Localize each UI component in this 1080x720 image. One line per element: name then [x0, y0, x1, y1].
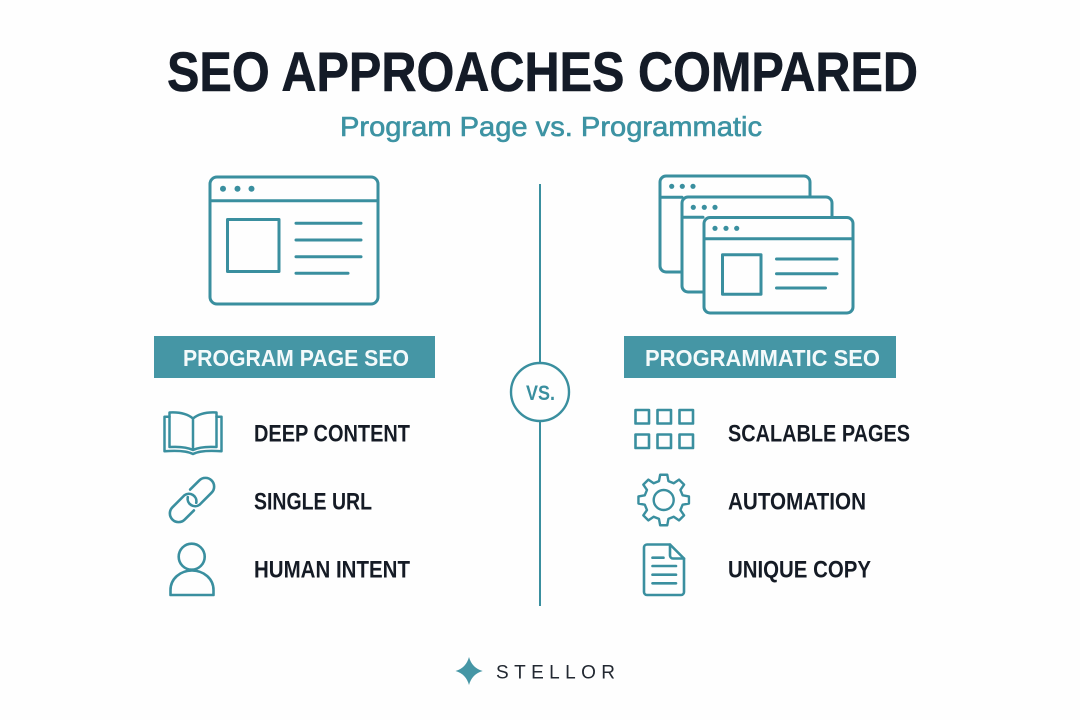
- logo: stellor: [456, 657, 615, 685]
- icon: chain link: [166, 474, 218, 526]
- label: human intent: HUMAN INTENT: [254, 556, 410, 584]
- icon: stacked browser windows: [660, 176, 853, 313]
- divider line bottom: [539, 421, 541, 606]
- label: unique copy: UNIQUE COPY: [728, 556, 871, 584]
- label: automation: AUTOMATION: [728, 488, 866, 516]
- icon: grid of pages: [636, 410, 693, 448]
- panel: programmatic banner: PROGRAMMATIC SEO: [645, 345, 880, 371]
- logo: stellor: STELLOR: [496, 662, 615, 683]
- title: SEO APPROACHES COMPARED: [167, 40, 918, 103]
- icon: open book: [164, 412, 222, 454]
- label: deep content: DEEP CONTENT: [254, 420, 410, 448]
- icon: document: [644, 544, 684, 595]
- divider line top: [539, 184, 541, 363]
- icon: person: [170, 544, 214, 595]
- icon: gear: [638, 475, 689, 525]
- label: single url: SINGLE URL: [254, 488, 372, 516]
- vs badge: [511, 363, 569, 421]
- icon: single browser window: [210, 177, 378, 304]
- panel: programmatic banner: [624, 336, 896, 378]
- subtitle: Program Page vs. Programmatic: [340, 111, 762, 142]
- vs badge: VS.: [526, 382, 555, 405]
- panel: program page banner: PROGRAM PAGE SEO: [183, 345, 409, 371]
- label: scalable pages: SCALABLE PAGES: [728, 420, 910, 448]
- panel: program page banner: [154, 336, 435, 378]
